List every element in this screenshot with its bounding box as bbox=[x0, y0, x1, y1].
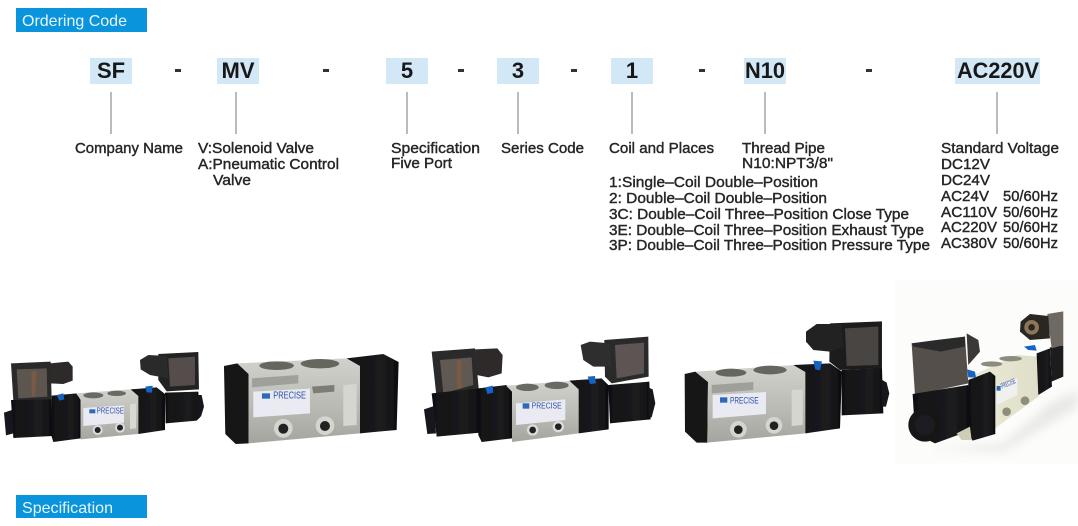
code segment: 5 bbox=[386, 58, 428, 134]
text: standard voltage: AC110V bbox=[941, 205, 997, 221]
text: valve type bbox=[198, 141, 339, 189]
heading: Specification bbox=[16, 495, 147, 518]
text: standard voltage: Standard Voltage bbox=[941, 141, 1059, 157]
text: coil and places: Coil and Places bbox=[609, 141, 714, 157]
text: specification bbox=[391, 141, 480, 172]
text: valve type: A:Pneumatic Control bbox=[198, 157, 339, 173]
product photo: double-coil valve 1 bbox=[4, 352, 204, 442]
separator bbox=[323, 69, 329, 72]
product label: PRECISE bbox=[730, 395, 759, 405]
separator bbox=[458, 69, 464, 72]
code segment: 1 bbox=[611, 58, 653, 134]
text: thread pipe: Thread Pipe bbox=[742, 141, 825, 157]
product label: PRECISE bbox=[97, 406, 124, 415]
text: coil and places: 3P: Double–Coil Three–Position Pressure Type bbox=[609, 238, 930, 254]
code segment: AC220V: AC220V bbox=[957, 58, 1039, 83]
text: coil and places: 2: Double–Coil Double–Position bbox=[609, 191, 827, 207]
heading: Ordering Code: Ordering Code bbox=[22, 13, 127, 30]
product photo: double-coil valve 2 bbox=[424, 337, 655, 442]
text: valve type: V:Solenoid Valve bbox=[198, 141, 314, 157]
code segment: N10 bbox=[744, 58, 786, 134]
text: thread pipe bbox=[742, 141, 833, 172]
heading: Ordering Code bbox=[16, 8, 147, 32]
text: standard voltage: 50/60Hz bbox=[1003, 220, 1058, 236]
text: thread pipe: N10:NPT3/8" bbox=[742, 156, 833, 172]
text: standard voltage: DC24V bbox=[941, 173, 990, 189]
separator bbox=[866, 69, 872, 72]
text: coil and places bbox=[609, 141, 930, 254]
text: standard voltage: 50/60Hz bbox=[1003, 189, 1058, 205]
text: standard voltage bbox=[941, 141, 1059, 252]
text: standard voltage: AC220V bbox=[941, 220, 997, 236]
product photo: angled valve on off-white backdrop bbox=[895, 280, 1078, 463]
text: standard voltage: AC24V bbox=[941, 189, 989, 205]
separator bbox=[571, 69, 577, 72]
text: specification: Five Port bbox=[391, 156, 452, 172]
text: standard voltage: DC12V bbox=[941, 157, 990, 173]
text: company name: Company Name bbox=[75, 141, 183, 157]
code segment: N10: N10 bbox=[745, 58, 785, 83]
product label: PRECISE bbox=[532, 401, 562, 411]
text: coil and places: 3E: Double–Coil Three–Position Exhaust Type bbox=[609, 223, 924, 239]
text: coil and places: 1:Single–Coil Double–Position bbox=[609, 175, 818, 191]
heading: Specification: Specification bbox=[22, 500, 113, 517]
code segment: MV bbox=[217, 58, 259, 134]
code segment: 5: 5 bbox=[401, 58, 413, 83]
text: standard voltage: 50/60Hz bbox=[1003, 236, 1058, 252]
product label: PRECISE bbox=[999, 376, 1017, 391]
text: standard voltage: 50/60Hz bbox=[1003, 205, 1058, 221]
code segment: 3 bbox=[497, 58, 539, 134]
code segment: 1: 1 bbox=[626, 58, 638, 83]
product label: PRECISE bbox=[273, 391, 306, 402]
text: specification: Specification bbox=[391, 141, 480, 157]
code segment: 3: 3 bbox=[512, 58, 524, 83]
product photo: base valve bbox=[224, 354, 399, 444]
text: series code: Series Code bbox=[501, 141, 584, 157]
text: coil and places: 3C: Double–Coil Three–Position Close Type bbox=[609, 207, 909, 223]
text: standard voltage: AC380V bbox=[941, 236, 997, 252]
code segment: SF bbox=[90, 58, 132, 134]
text: valve type: Valve bbox=[213, 173, 251, 189]
code segment: SF: SF bbox=[97, 58, 125, 83]
separator bbox=[175, 69, 181, 72]
code segment: AC220V bbox=[955, 58, 1040, 134]
separator bbox=[699, 69, 705, 72]
code segment: MV: MV bbox=[222, 58, 255, 83]
product photo: single-coil valve bbox=[685, 321, 889, 443]
